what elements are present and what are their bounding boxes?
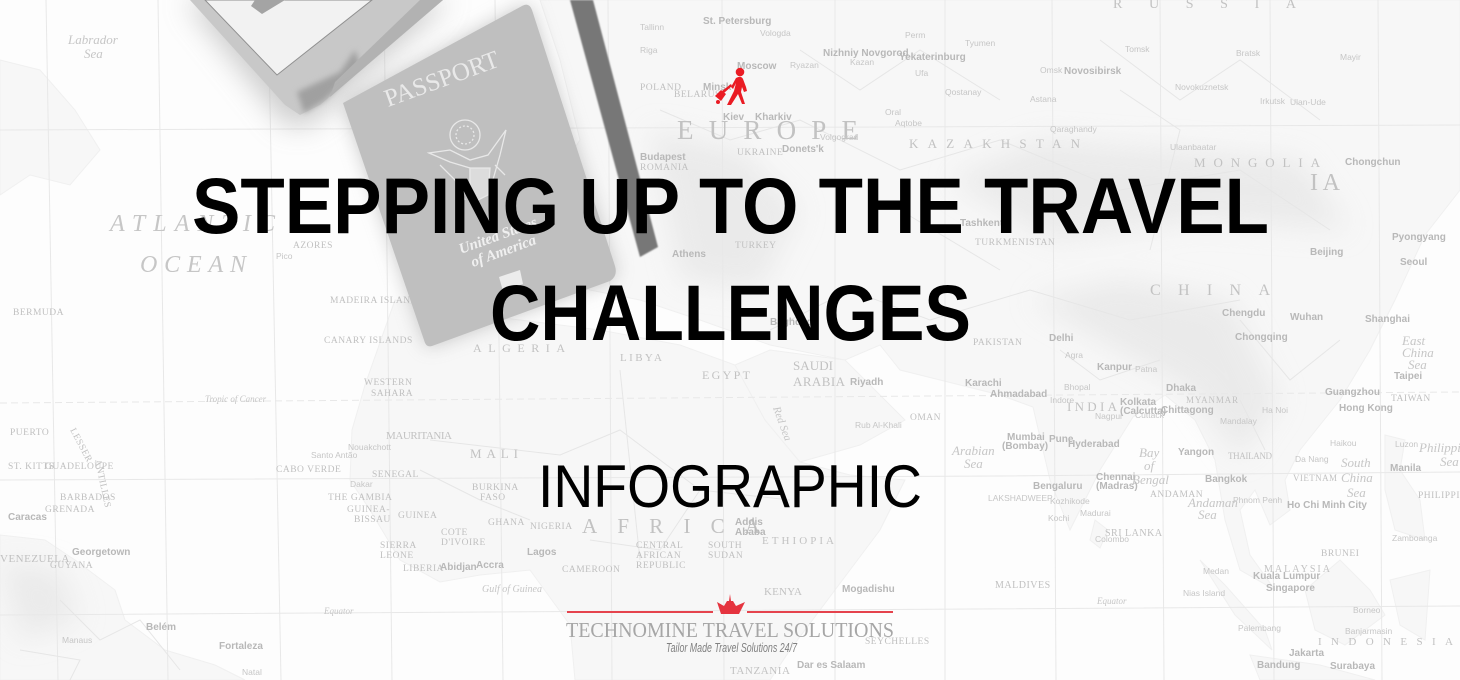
city and country labels: ANTILLES xyxy=(92,459,112,509)
city and country labels: Budapest xyxy=(640,152,686,163)
city and country labels: Medan xyxy=(1203,566,1229,576)
city and country labels: Phnom Penh xyxy=(1233,495,1282,505)
ocean and region labels: Sea xyxy=(84,46,103,61)
city and country labels: Addis xyxy=(735,517,763,528)
logo crown xyxy=(717,594,745,614)
city and country labels: Haikou xyxy=(1330,438,1357,448)
city and country labels: LIBERIA xyxy=(403,564,444,574)
ocean and region labels: Tropic of Cancer xyxy=(205,394,267,404)
city and country labels: Colombo xyxy=(1095,534,1129,544)
city and country labels: Perm xyxy=(905,30,925,40)
city and country labels: Manila xyxy=(1390,463,1422,474)
ocean and region labels: INDONESIA xyxy=(1318,636,1453,648)
subtitle: INFOGRAPHIC xyxy=(538,453,922,520)
city and country labels: BERMUDA xyxy=(13,308,64,318)
city and country labels: Bratsk xyxy=(1236,48,1261,58)
city and country labels: MADEIRA ISLANDS xyxy=(330,296,424,306)
city and country labels: Pyongyang xyxy=(1392,232,1446,243)
ocean and region labels: South xyxy=(1341,455,1371,470)
city and country labels: BRUNEI xyxy=(1321,549,1359,559)
ocean and region labels: ATLANTIC xyxy=(108,211,276,237)
city and country labels: PAKISTAN xyxy=(973,338,1022,348)
city and country labels: Nouakchott xyxy=(348,442,392,452)
city and country labels: Patna xyxy=(1135,364,1157,374)
city and country labels: Ulan-Ude xyxy=(1290,97,1326,107)
city and country labels: AFRICAN xyxy=(636,551,681,561)
city and country labels: Tyumen xyxy=(965,38,996,48)
title xyxy=(192,161,1269,357)
city and country labels: Mogadishu xyxy=(842,584,895,595)
ocean and region labels: INDIA xyxy=(1067,399,1118,414)
city and country labels: CANARY ISLANDS xyxy=(324,336,413,346)
city and country labels: Georgetown xyxy=(72,547,130,558)
city and country labels: Bandung xyxy=(1257,660,1300,671)
ocean and region labels: MYANMAR xyxy=(1186,395,1238,405)
city and country labels: Karachi xyxy=(965,378,1002,389)
city and country labels: Singapore xyxy=(1266,583,1315,594)
city and country labels: TURKMENISTAN xyxy=(975,238,1055,248)
city and country labels: UKRAINE xyxy=(737,148,783,158)
city and country labels: Tallinn xyxy=(640,22,664,32)
city and country labels: Volgograd xyxy=(820,132,859,142)
city and country labels: Astana xyxy=(1030,94,1057,104)
city and country labels: Nagpur xyxy=(1095,411,1123,421)
city and country labels: Rub Al-Khali xyxy=(855,420,902,430)
city and country labels: Beijing xyxy=(1310,247,1343,258)
ocean and region labels: Andaman xyxy=(1187,495,1238,510)
ocean and region labels: Sea xyxy=(1408,357,1427,372)
ocean and region labels: Bengal xyxy=(1132,472,1169,487)
city and country labels: Cuttack xyxy=(1135,410,1165,420)
city and country labels: Caracas xyxy=(8,512,47,523)
city and country labels: Chongqing xyxy=(1235,332,1288,343)
city and country labels: Kanpur xyxy=(1097,362,1132,373)
city and country labels: OMAN xyxy=(910,413,941,423)
passport heading: PASSPORT xyxy=(381,46,503,113)
city and country labels: ANDAMAN xyxy=(1150,490,1203,500)
city and country labels: LEONE xyxy=(380,551,414,561)
city and country labels: FASO xyxy=(480,493,506,503)
ocean and region labels: MALI xyxy=(470,446,518,461)
ocean and region labels: Sea xyxy=(1347,485,1366,500)
city and country labels: SRI LANKA xyxy=(1105,528,1163,539)
city and country labels: Omsk xyxy=(1040,65,1063,75)
city and country labels: Hyderabad xyxy=(1068,439,1120,450)
city and country labels: Nias Island xyxy=(1183,588,1225,598)
city and country labels: TURKEY xyxy=(735,241,777,251)
city and country labels: WESTERN xyxy=(364,378,412,388)
ocean and region labels: ETHIOPIA xyxy=(762,535,834,547)
ocean and region labels: Sea xyxy=(964,456,983,471)
city and country labels: ST. KITTS xyxy=(8,462,55,472)
ocean and region labels: MALAYSIA xyxy=(1264,564,1331,575)
eagle seal xyxy=(429,120,506,200)
city and country labels: Bengaluru xyxy=(1033,481,1082,492)
city and country labels: Belém xyxy=(146,622,176,633)
passport: of America xyxy=(469,232,539,271)
ocean and region labels: Labrador xyxy=(67,32,119,47)
city and country labels: BISSAU xyxy=(354,515,391,525)
passport xyxy=(343,5,616,346)
ocean and region labels: East xyxy=(1401,333,1426,348)
city and country labels: Natal xyxy=(242,667,262,677)
city and country labels: GUINEA xyxy=(398,511,437,521)
ocean and region labels: ARABIA xyxy=(793,374,846,389)
ocean and region labels: CHINA xyxy=(1150,282,1270,299)
city and country labels: Tashkent xyxy=(960,218,1004,229)
city and country labels: GUYANA xyxy=(50,561,93,571)
ocean and region labels: TANZANIA xyxy=(730,665,790,677)
logo xyxy=(566,594,894,655)
city and country labels: Novosibirsk xyxy=(1064,66,1122,77)
ocean and region labels: Equator xyxy=(1096,596,1127,606)
city and country labels: Da Nang xyxy=(1295,454,1329,464)
ocean and region labels: Equator xyxy=(323,606,354,616)
ocean and region labels: EGYPT xyxy=(702,368,751,382)
city and country labels: GUADELOUPE xyxy=(45,462,114,472)
city and country labels: LESSER xyxy=(67,427,94,464)
city and country labels: Athens xyxy=(672,249,706,260)
city and country labels: Yangon xyxy=(1178,447,1214,458)
city and country labels: MALDIVES xyxy=(995,580,1051,591)
city and country labels: Kharkiv xyxy=(755,112,792,123)
ocean and region labels: KENYA xyxy=(764,586,802,598)
city and country labels: Pico xyxy=(276,251,293,261)
ocean and region labels: Red Sea xyxy=(770,404,794,443)
city and country labels: CAMEROON xyxy=(562,565,620,575)
ocean and region labels: Arabian xyxy=(951,443,995,458)
city and country labels: Taipei xyxy=(1394,371,1422,382)
city and country labels: (Madras) xyxy=(1096,481,1138,492)
city and country labels: THE GAMBIA xyxy=(328,493,392,503)
city and country labels: COTE xyxy=(441,528,468,538)
city and country labels: Minsk xyxy=(703,82,732,93)
city and country labels: Accra xyxy=(476,560,504,571)
city and country labels: Tomsk xyxy=(1125,44,1150,54)
city and country labels: Mayir xyxy=(1340,52,1361,62)
city and country labels: NIGERIA xyxy=(530,522,573,532)
city and country labels: Indore xyxy=(1050,395,1074,405)
tagline: Tailor Made Travel Solutions 24/7 xyxy=(666,641,798,655)
city and country labels: Wuhan xyxy=(1290,312,1323,323)
city and country labels: GHANA xyxy=(488,518,525,528)
city and country labels: Jakarta xyxy=(1289,648,1324,659)
ocean and region labels: OCEAN xyxy=(140,252,248,278)
city and country labels: Hong Kong xyxy=(1339,403,1393,414)
city and country labels: Ryazan xyxy=(790,60,819,70)
ocean and region labels: VIETNAM xyxy=(1293,473,1337,483)
city and country labels: Irkutsk xyxy=(1260,96,1286,106)
city and country labels: Santo Antão xyxy=(311,450,358,460)
ocean and region labels: LIBYA xyxy=(620,352,662,364)
company name: TECHNOMINE TRAVEL SOLUTIONS xyxy=(566,618,894,642)
city and country labels: SAHARA xyxy=(371,389,413,399)
city and country labels: SIERRA xyxy=(380,541,417,551)
city and country labels: Dakar xyxy=(350,479,373,489)
city and country labels: CABO VERDE xyxy=(276,465,341,475)
camera xyxy=(185,0,450,125)
city and country labels: Riyadh xyxy=(850,377,883,388)
chip symbol xyxy=(499,270,523,291)
city and country labels: VENEZUELA xyxy=(0,553,70,565)
city and country labels: (Bombay) xyxy=(1002,441,1048,452)
city and country labels: Ulaanbaatar xyxy=(1170,142,1216,152)
city and country labels: REPUBLIC xyxy=(636,561,686,571)
city and country labels: Kozhikode xyxy=(1050,496,1090,506)
city and country labels: Bhopal xyxy=(1064,382,1091,392)
city and country labels: Kuala Lumpur xyxy=(1253,571,1320,582)
city and country labels: Qostanay xyxy=(945,87,982,97)
city and country labels: GRENADA xyxy=(45,505,95,515)
ocean and region labels: Bay xyxy=(1139,445,1159,460)
city and country labels: Delhi xyxy=(1049,333,1074,344)
city and country labels: Abidjan xyxy=(440,562,477,573)
city and country labels: Donets'k xyxy=(782,144,824,155)
city and country labels: SOUTH xyxy=(708,541,742,551)
city and country labels: Kazan xyxy=(850,57,874,67)
city and country labels: Dhaka xyxy=(1166,383,1196,394)
city and country labels: BELARUS xyxy=(674,90,721,100)
title: STEPPING UP TO THE TRAVEL xyxy=(192,161,1269,250)
ocean and region labels: MONGOLIA xyxy=(1194,155,1321,170)
city and country labels: Chongchun xyxy=(1345,157,1401,168)
city and country labels: Dar es Salaam xyxy=(797,660,865,671)
ocean and region labels: Sea xyxy=(1198,507,1217,522)
ocean and region labels: KAZAKHSTAN xyxy=(909,136,1081,151)
city and country labels: Chengdu xyxy=(1222,308,1265,319)
city and country labels: Chittagong xyxy=(1161,405,1214,416)
city and country labels: Agra xyxy=(1065,350,1083,360)
city and country labels: GUINEA- xyxy=(347,505,390,515)
city and country labels: Manaus xyxy=(62,635,92,645)
city and country labels: POLAND xyxy=(640,83,682,93)
city and country labels: LAKSHADWEEP xyxy=(988,493,1053,503)
passport country text: United States xyxy=(457,215,540,258)
city and country labels: Oral xyxy=(885,107,901,117)
city and country labels: Borneo xyxy=(1353,605,1381,615)
city and country labels: BURKINA xyxy=(472,483,519,493)
city and country labels: Chennai xyxy=(1096,472,1136,483)
city and country labels: ROMANIA xyxy=(640,163,689,173)
city and country labels: Kochi xyxy=(1048,513,1069,523)
city and country labels: St. Petersburg xyxy=(703,16,771,27)
ocean and region labels: of xyxy=(1144,458,1156,473)
city and country labels: Baghdad xyxy=(770,317,813,328)
terrain shading xyxy=(0,130,1350,640)
city and country labels: Riga xyxy=(640,45,658,55)
city and country labels: AZORES xyxy=(293,241,333,251)
ocean and region labels: Sea xyxy=(1440,454,1459,469)
city and country labels: Ababa xyxy=(735,527,766,538)
ocean and region labels: Gulf of Guinea xyxy=(482,584,542,595)
city and country labels: Mandalay xyxy=(1220,416,1258,426)
city and country labels: Guangzhou xyxy=(1325,387,1380,398)
city and country labels: Aqtobe xyxy=(895,118,922,128)
ocean and region labels: China xyxy=(1341,470,1373,485)
city and country labels: SEYCHELLES xyxy=(865,637,930,647)
icon: traveller with suitcase xyxy=(715,68,747,105)
ocean and region labels: IA xyxy=(1310,170,1341,196)
city and country labels: Bangkok xyxy=(1205,474,1248,485)
city and country labels: Luzon xyxy=(1395,439,1418,449)
city and country labels: Palembang xyxy=(1238,623,1281,633)
city and country labels: Yekaterinburg xyxy=(899,52,966,63)
city and country labels: Pune xyxy=(1049,434,1074,445)
city and country labels: Lagos xyxy=(527,547,557,558)
title: CHALLENGES xyxy=(490,268,971,357)
city and country labels: Fortaleza xyxy=(219,641,263,652)
city and country labels: TAIWAN xyxy=(1391,394,1431,404)
ocean and region labels: SAUDI xyxy=(793,358,833,373)
city and country labels: CENTRAL xyxy=(636,541,683,551)
city and country labels: D'IVOIRE xyxy=(441,538,486,548)
city and country labels: Mumbai xyxy=(1007,432,1045,443)
ocean and region labels: MAURITANIA xyxy=(386,430,452,442)
city and country labels: Ufa xyxy=(915,68,928,78)
city and country labels: SENEGAL xyxy=(372,470,419,480)
city and country labels: Qaraghandy xyxy=(1050,124,1098,134)
city and country labels: Ha Noi xyxy=(1262,405,1288,415)
city and country labels: SUDAN xyxy=(708,551,743,561)
city and country labels: Madurai xyxy=(1080,508,1111,518)
city and country labels: Moscow xyxy=(737,61,777,72)
city and country labels: Ahmadabad xyxy=(990,389,1047,400)
city and country labels: Nizhniy Novgorod xyxy=(823,48,909,59)
ocean and region labels: ALGERIA xyxy=(473,341,565,355)
city and country labels: PUERTO xyxy=(10,428,49,438)
ocean and region labels: AFRICA xyxy=(582,514,761,538)
city and country labels: Surabaya xyxy=(1330,661,1375,672)
city and country labels: Kiev xyxy=(723,112,745,123)
city and country labels: Banjarmasin xyxy=(1345,626,1393,636)
city and country labels: BARBADOS xyxy=(60,493,116,503)
logo rules xyxy=(567,611,893,613)
city and country labels: Ho Chi Minh City xyxy=(1287,500,1367,511)
ocean and region labels: China xyxy=(1402,345,1434,360)
ocean and region labels: THAILAND xyxy=(1228,451,1272,461)
ocean and region labels: EUROPE xyxy=(677,115,858,145)
city and country labels: Zamboanga xyxy=(1392,533,1438,543)
city and country labels: Novokuznetsk xyxy=(1175,82,1229,92)
city and country labels: Shanghai xyxy=(1365,314,1410,325)
city and country labels: Vologda xyxy=(760,28,791,38)
city and country labels: Kolkata xyxy=(1120,397,1157,408)
strap xyxy=(570,0,658,257)
city and country labels: (Calcutta) xyxy=(1120,406,1166,417)
city and country labels: Seoul xyxy=(1400,257,1427,268)
